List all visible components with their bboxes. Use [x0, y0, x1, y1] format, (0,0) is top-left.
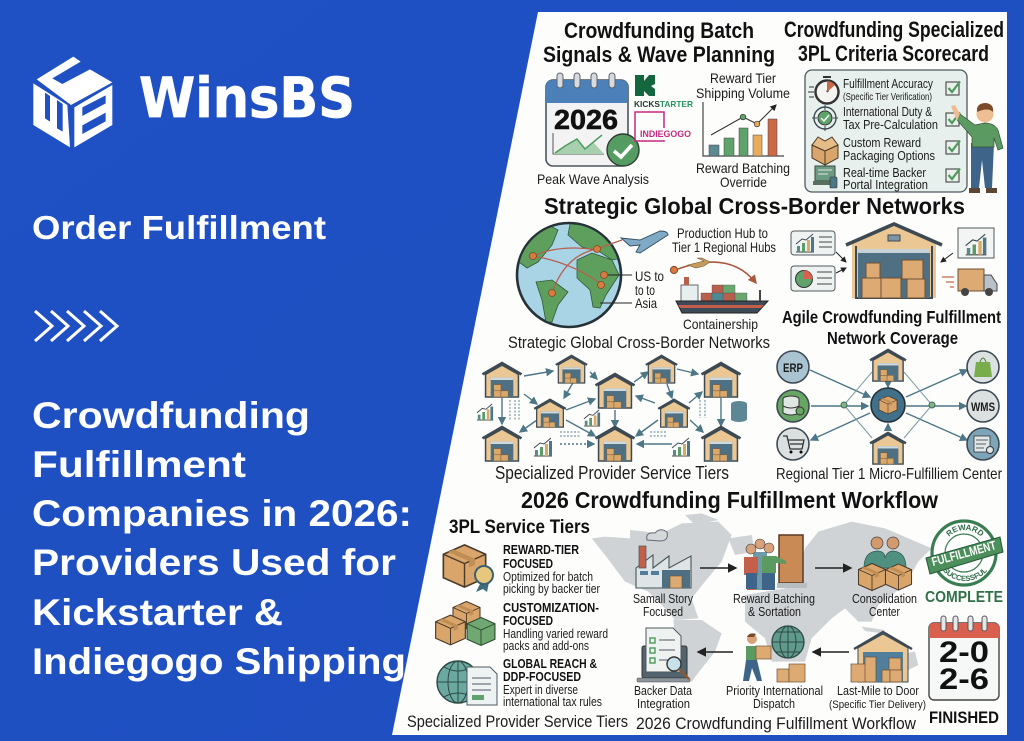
- step label: [726, 683, 823, 711]
- tier text: Optimized for batch: [503, 570, 593, 584]
- step: priority dispatch: [726, 626, 823, 711]
- node: cart: [777, 428, 809, 460]
- badge: reward fulfillment successful: [925, 519, 1004, 587]
- caption: specialized provider service tiers: Specialized Provider Service Tiers: [407, 712, 628, 731]
- icon: staff with boxes: [858, 537, 912, 590]
- icon: airplane: [621, 231, 668, 253]
- hub warehouses: [870, 350, 906, 464]
- icon: target: [812, 105, 838, 131]
- step label: Backer Data: [634, 683, 693, 698]
- icon: factory: [636, 530, 691, 588]
- tier text: [503, 542, 600, 596]
- criteria text: International Duty &: [843, 104, 932, 119]
- tier text: CUSTOMIZATION-: [503, 600, 599, 615]
- caption: strategic global cross-border networks: Strategic Global Cross-Border Networks: [508, 333, 770, 352]
- icon: finished calendar: 2-6: [939, 663, 989, 696]
- arrow: [700, 567, 736, 569]
- badge: reward fulfillment successful: REWARD: [946, 524, 984, 536]
- node: WMS: WMS: [971, 400, 995, 414]
- tier text: FOCUSED: [503, 556, 553, 571]
- step label: [733, 591, 815, 619]
- node: WMS: [967, 390, 999, 422]
- step: consolidation center: [852, 537, 917, 619]
- icon: finished calendar: 2-0: [939, 636, 989, 669]
- icon: globe with routes: [517, 223, 632, 327]
- step label: Last-Mile to Door: [837, 683, 920, 698]
- caption: workflow: 2026 Crowdfunding Fulfillment Workflow: [636, 714, 917, 733]
- heading: [782, 307, 1001, 348]
- arrow: [815, 567, 851, 569]
- step label: Focused: [643, 604, 683, 619]
- caption: peak wave analysis: Peak Wave Analysis: [537, 171, 649, 187]
- step label: (Specific Tier Delivery): [829, 699, 926, 711]
- icon: backer portal device: [813, 166, 837, 188]
- scorecard box: [805, 70, 967, 192]
- main title: Indiegogo Shipping: [32, 641, 406, 682]
- node: ERP: [777, 351, 809, 383]
- arrow: sea route with small plane: [670, 258, 756, 283]
- step label: [634, 683, 693, 711]
- criteria text: Fulfillment Accuracy: [843, 76, 933, 91]
- icon: growth chart card: [958, 228, 994, 258]
- tier text: Expert in diverse: [503, 683, 578, 697]
- step label: & Sortation: [748, 604, 801, 619]
- icon: delivery truck: [942, 269, 997, 296]
- step label: Samall Story: [633, 591, 693, 606]
- panel: workflow: [407, 487, 1004, 733]
- main title: [32, 395, 412, 682]
- step: last-mile to door: [829, 632, 926, 711]
- logo: WinsBS: [33, 57, 355, 147]
- chart label: reward tier shipping volume: [696, 70, 790, 101]
- icon: 2026 calendar: [546, 73, 639, 166]
- arrow: [813, 651, 849, 653]
- icon: analytics cards: [791, 231, 835, 291]
- caption: reward batching override: [696, 160, 790, 190]
- step label: Dispatch: [753, 696, 795, 711]
- icon: globe and document: [437, 661, 497, 705]
- heading: 2026 Crowdfunding Fulfillment Workflow: [521, 487, 938, 513]
- tier 2: customization-focused: [436, 600, 608, 653]
- tier 1: reward-tier focused: [443, 542, 600, 596]
- step label: Center: [869, 604, 901, 619]
- tier text: picking by backer tier: [503, 582, 600, 596]
- icon: large warehouse: [846, 224, 942, 298]
- criteria text: [843, 76, 938, 192]
- step: reward batching: [733, 535, 815, 619]
- step: backer data integration: [634, 628, 693, 711]
- step: factory: [633, 530, 693, 619]
- step label: [633, 591, 693, 619]
- route label: US to Asia: to to: [635, 282, 655, 298]
- heading: Network Coverage: [827, 328, 958, 348]
- main title: Crowdfunding: [32, 395, 310, 436]
- network links: [502, 369, 721, 444]
- tier text: REWARD-TIER: [503, 542, 580, 557]
- bar chart: [703, 102, 784, 156]
- tier 3: global reach: [437, 656, 602, 709]
- icon: 2026 calendar: 2026: [554, 104, 618, 135]
- icon: WinsBS cube: [33, 57, 112, 147]
- criteria text: (Specific Tier Verification): [843, 91, 932, 103]
- arrows: analytics to warehouse: [836, 252, 953, 273]
- route label: US to Asia: [635, 268, 664, 311]
- main title: Providers Used for: [32, 542, 396, 583]
- icon: laptop with checklist: [637, 628, 690, 682]
- caption: reward batching override: Override: [720, 174, 767, 190]
- icon: container ship: [676, 277, 768, 313]
- route label: production hub: [672, 225, 776, 255]
- icon: finished calendar: [929, 616, 999, 700]
- icon: chevron arrows: [35, 311, 117, 341]
- network arrows: [810, 370, 967, 440]
- icon: box with ribbon: [443, 545, 493, 592]
- tier text: Handling varied reward: [503, 627, 608, 641]
- node: ERP: ERP: [783, 361, 803, 375]
- heading: [784, 17, 1004, 66]
- icons: check boxes: [946, 82, 960, 182]
- arrow: [698, 651, 733, 653]
- criteria text: Portal Integration: [843, 177, 928, 192]
- criteria text: Real-time Backer: [843, 165, 927, 180]
- tier text: FOCUSED: [503, 613, 553, 628]
- wordmark: WinsBS: [139, 66, 355, 130]
- route label: US to Asia: Asia: [635, 295, 657, 311]
- node: settings: [967, 428, 999, 460]
- subheading: 3PL service tiers: 3PL Service Tiers: [449, 517, 590, 538]
- tier text: [503, 600, 608, 653]
- step label: Reward Batching: [733, 591, 815, 606]
- panel: strategic global cross-border networks: [508, 193, 997, 352]
- icon: courier with globe: [743, 626, 805, 682]
- node: shop: [967, 351, 999, 383]
- main title: Kickstarter &: [32, 592, 283, 633]
- panel: batch signals and wave planning: [537, 18, 790, 190]
- icon: stopwatch: [808, 77, 838, 104]
- node: database: [777, 390, 809, 422]
- label: finished: FINISHED: [929, 709, 999, 727]
- icon: Indiegogo logo: [635, 112, 691, 141]
- route label: US to Asia: US to: [635, 268, 664, 284]
- step label: [829, 683, 926, 711]
- badge: reward fulfillment successful: SUCCESSFUL: [943, 569, 988, 581]
- heading: [543, 18, 775, 67]
- chart label: reward tier shipping volume: Reward Tier: [710, 70, 776, 86]
- icon: Indiegogo logo: INDIEGOGO: [640, 129, 691, 140]
- icon: stacked boxes: [436, 602, 495, 645]
- warehouse nodes: [482, 356, 741, 461]
- icon: warehouse with boxes: [851, 632, 912, 682]
- panel: specialized provider network: [477, 356, 747, 483]
- criteria text: Tax Pre-Calculation: [843, 117, 938, 132]
- category label: Order Fulfillment: [32, 209, 326, 246]
- label: complete: COMPLETE: [925, 589, 1003, 606]
- caption: specialized provider service tiers: Specialized Provider Service Tiers: [495, 463, 729, 483]
- world map backdrop: [592, 513, 932, 682]
- step label: Consolidation: [852, 591, 917, 606]
- chart label: reward tier shipping volume: Shipping Volume: [696, 85, 790, 101]
- tier text: DDP-FOCUSED: [503, 669, 581, 684]
- main title: Fulfillment: [32, 444, 246, 485]
- badge: reward fulfillment successful: FULFILLMENT: [930, 538, 998, 569]
- heading: Strategic Global Cross-Border Networks: [544, 193, 965, 219]
- mini charts and data icons: [477, 400, 747, 456]
- panel: white infographic sheet: [392, 12, 1007, 735]
- route label: production hub: Production Hub to: [677, 225, 768, 241]
- main title: Companies in 2026:: [32, 493, 412, 534]
- icon: open reward box: [812, 137, 838, 165]
- step label: Priority International: [726, 683, 823, 698]
- route label: production hub: Tier 1 Regional Hubs: [672, 239, 776, 255]
- icon: Kickstarter logo: [634, 75, 693, 109]
- heading: Crowdfunding Batch: [564, 18, 754, 43]
- caption: reward batching override: Reward Batching: [696, 160, 790, 176]
- criteria text: Custom Reward: [843, 135, 921, 150]
- icon: people at door: [744, 535, 807, 590]
- step label: [852, 591, 917, 619]
- heading: Signals & Wave Planning: [543, 42, 775, 67]
- tier text: international tax rules: [503, 695, 602, 709]
- tier text: packs and add-ons: [503, 639, 589, 653]
- junction dots: [841, 402, 935, 408]
- node: central hub: [871, 388, 905, 422]
- panel: agile network coverage: [776, 307, 1003, 483]
- tier text: [503, 656, 602, 709]
- icon: Kickstarter logo: KICKSTARTER: [634, 99, 693, 109]
- criteria text: Packaging Options: [843, 148, 935, 163]
- panel: 3PL criteria scorecard: [784, 17, 1004, 193]
- caption: containership: Containership: [683, 316, 758, 332]
- icon: presenter person: [951, 103, 1003, 193]
- step label: Integration: [637, 696, 690, 711]
- tier text: GLOBAL REACH &: [503, 656, 597, 671]
